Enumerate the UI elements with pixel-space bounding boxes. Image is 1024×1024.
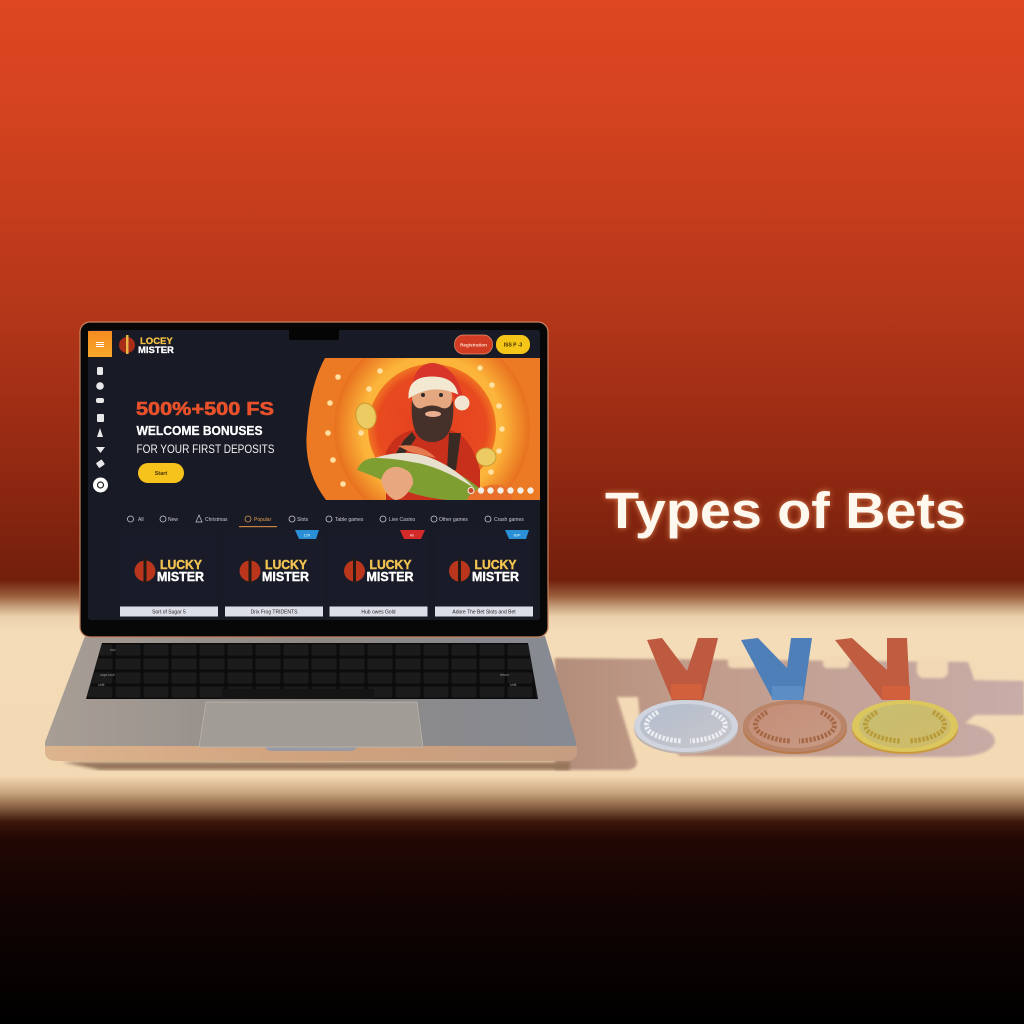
hand [381,467,413,500]
trackpad [199,702,423,747]
laptop [45,322,577,761]
category tabs: Other games [439,517,468,523]
laptop base [45,636,577,761]
game card 2: Drix Frog TRIDENTS [251,610,298,616]
game card 3: LUCKY [370,557,412,572]
registration button: Registration [460,342,487,348]
keyboard: esc [110,648,116,652]
header logo [119,335,174,356]
game card 3: MISTER [366,569,414,584]
banner text: WELCOME BONUSES [136,424,262,438]
carousel dots [468,487,534,494]
category tabs: Popular [254,517,272,523]
game card 2: LUCKY [265,557,307,572]
game card 3 [330,530,428,616]
game card 3: Hub owes Gold [361,610,396,616]
category tabs: New [168,517,178,523]
game card 2 [225,530,323,616]
beard [412,400,453,442]
screen [88,328,540,620]
hero illustration [306,358,540,500]
fish [357,456,480,500]
coins [355,402,377,430]
banner button [138,463,184,483]
game card 4: MISTER [472,569,520,584]
banner text [136,398,274,456]
game badges: All [410,532,414,538]
registration button [454,335,492,354]
title: Types of Bets: Types of Bets [605,482,966,539]
category tabs [128,515,524,527]
login button [496,335,530,354]
title: Types of Bets: Types of Bets [605,482,966,539]
silver medal with red ribbon [634,638,738,754]
banner text: 500%+500 FS [136,398,274,419]
shadow below laptop front [62,762,570,770]
keyboard: return [500,673,509,677]
category tabs: Christmas [205,517,228,523]
light dots [325,365,505,487]
table shadows cast by laptop and medals [555,657,1024,770]
category tabs: Live Casino [389,517,415,523]
sidebar circle icon [93,478,108,492]
game card 4: Adore The Bet Slots and Bet [452,610,516,616]
game card 4: LUCKY [474,557,517,572]
banner button: Start [155,471,167,477]
bronze medal with blue ribbon [741,638,847,754]
game badges: 80P [513,532,521,538]
game card 1 [120,530,218,616]
category tabs: Table games [335,517,364,523]
login button: ISS P -3 [504,342,522,348]
header logo: MISTER [138,345,174,356]
category tabs: Crash games [494,517,524,523]
keyboard [86,643,538,699]
keyboard: shift [510,683,516,687]
notch on front edge [265,745,357,751]
game badges: 12K [303,532,311,538]
sidebar icons [96,367,105,468]
game badges [295,530,529,539]
character body [386,430,480,500]
laptop lid and bezel [80,322,548,637]
category tabs: All [138,517,144,523]
gold medal with red ribbon [835,638,958,754]
keyboard: caps lock [100,673,115,677]
game card 4 [435,530,533,616]
game card 1: Sort of Sugar 5 [152,610,186,616]
face [412,389,452,408]
game card 1: LUCKY [160,557,202,572]
camera notch [289,328,339,340]
keyboard: shift [98,683,104,687]
header logo: LOCEY [140,336,173,347]
menu button [88,331,112,357]
banner text: FOR YOUR FIRST DEPOSITS [136,442,274,456]
game card 1: MISTER [157,569,205,584]
category tabs: Slots [297,517,309,523]
santa hat [412,363,464,402]
game card 2: MISTER [262,569,310,584]
